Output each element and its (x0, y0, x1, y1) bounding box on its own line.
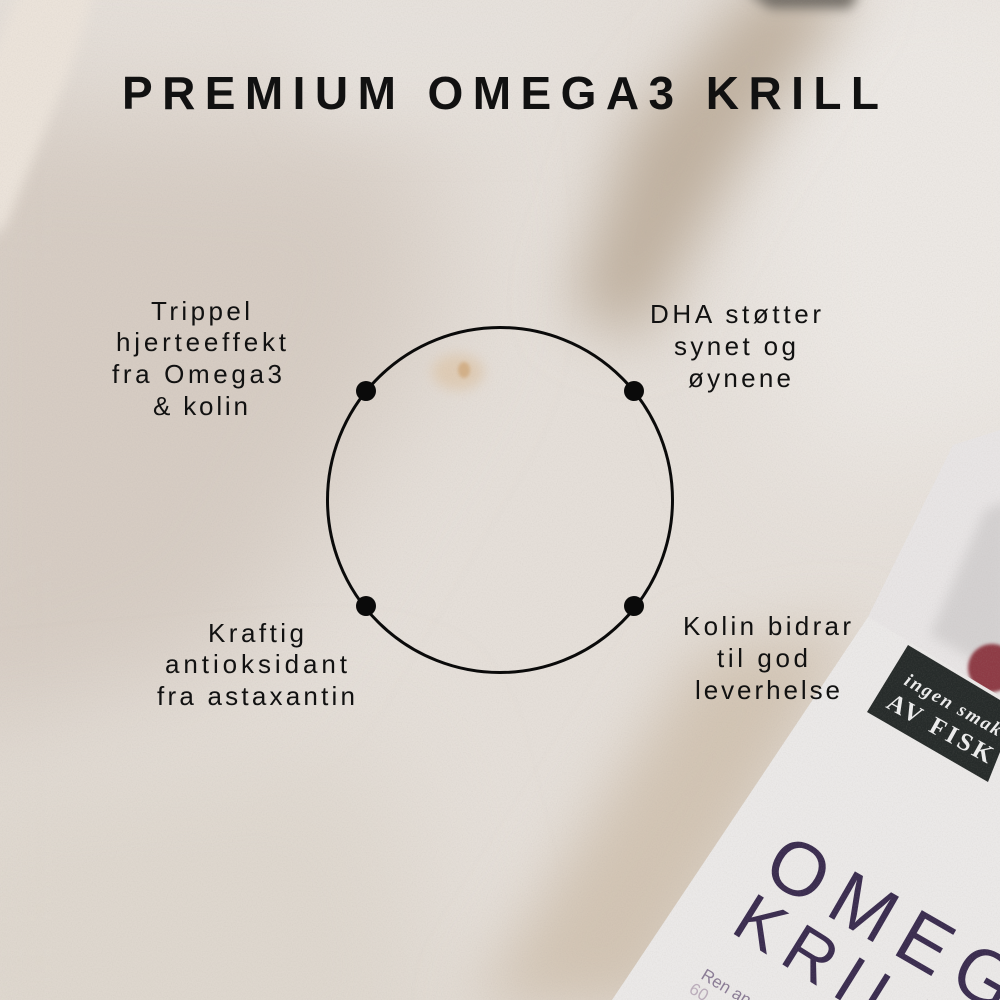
text: top right benefit: DHA støtter (650, 299, 821, 329)
title: PREMIUM OMEGA3 KRILL (122, 67, 879, 119)
product box (612, 430, 1000, 1000)
text: top left benefit: hjerteeffekt (116, 327, 287, 357)
text: top right benefit: øynene (688, 363, 791, 393)
red capsule (968, 644, 1000, 692)
text: top right benefit (650, 299, 821, 393)
text: top left benefit: Trippel (151, 296, 250, 326)
text: bottom left benefit (157, 618, 355, 711)
text: bottom right benefit: til god (717, 643, 808, 673)
badge: ingen smak av fisk (867, 645, 1000, 782)
box front (612, 617, 1000, 1000)
text: bottom right benefit (683, 611, 851, 705)
badge: ingen smak av fisk: AV FISK (882, 689, 998, 769)
text: top right benefit: synet og (674, 331, 796, 361)
text: bottom left benefit: Kraftig (208, 618, 304, 648)
text: bottom right benefit: leverhelse (695, 675, 840, 705)
central circle diagram (328, 328, 672, 672)
text: bottom left benefit: fra astaxantin (157, 681, 355, 711)
text: top left benefit: fra Omega3 (112, 359, 282, 389)
text: bottom left benefit: antioksidant (165, 649, 348, 679)
text: top left benefit: & kolin (153, 391, 248, 421)
text: top left benefit (112, 296, 287, 421)
text: bottom right benefit: Kolin bidrar (683, 611, 851, 641)
box inner flap (868, 471, 1000, 696)
